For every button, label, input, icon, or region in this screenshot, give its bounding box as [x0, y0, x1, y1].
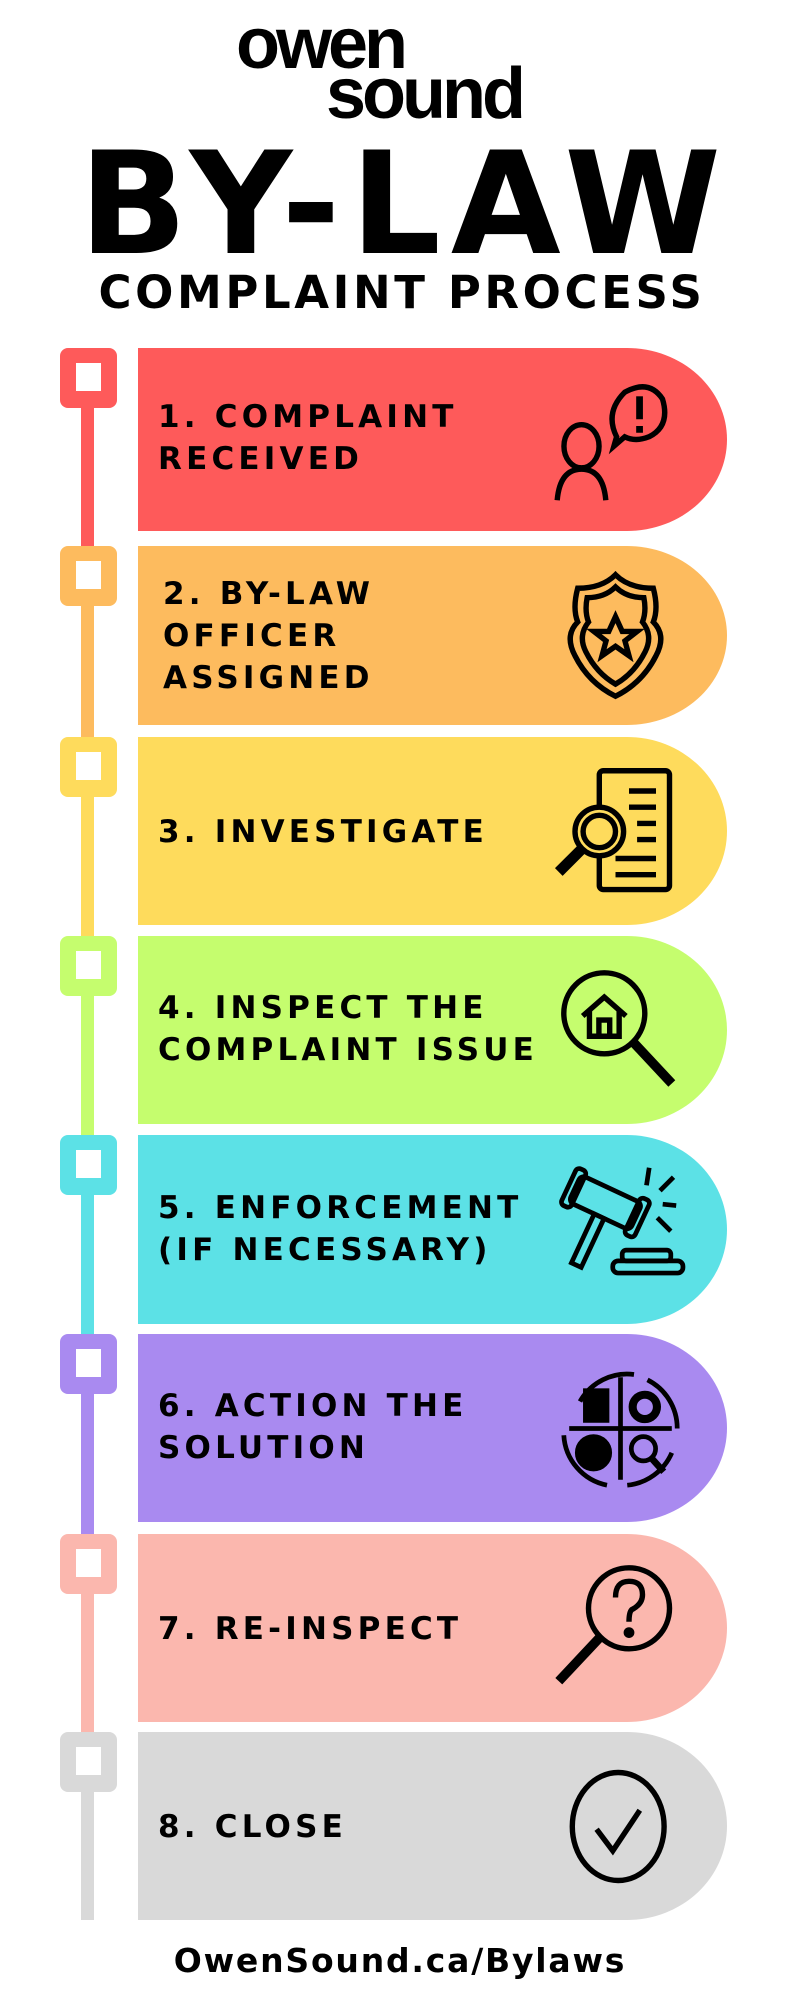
step 5 text: 5. ENFORCEMENT: [158, 1190, 523, 1226]
step 6 text: [158, 1388, 468, 1466]
step 2 text: 2. BY-LAW: [163, 576, 374, 612]
step 3 text: 3. INVESTIGATE: [158, 814, 488, 850]
logo: owen sound: [236, 4, 522, 134]
step 7 text: 7. RE-INSPECT: [158, 1611, 462, 1647]
step 1 text: [158, 399, 458, 477]
step 1 text: 1. COMPLAINT: [158, 399, 458, 435]
step 6 text: SOLUTION: [158, 1430, 369, 1466]
icon: process cycle: [561, 1372, 680, 1488]
step 5 text: (IF NECESSARY): [158, 1232, 492, 1268]
step 6 text: 6. ACTION THE: [158, 1388, 468, 1424]
step 2 text: ASSIGNED: [163, 660, 374, 696]
icon: badge: [567, 571, 664, 700]
panel: step 2: [138, 546, 727, 725]
step 4 text: [158, 990, 538, 1068]
subtitle: COMPLAINT PROCESS: [99, 266, 705, 319]
step 5 text: [158, 1190, 523, 1268]
step 2 text: [163, 576, 374, 696]
logo: owen sound: owen: [236, 4, 404, 84]
panel: step 6: [138, 1334, 727, 1522]
icon: gavel: [559, 1166, 686, 1276]
step 4 text: 4. INSPECT THE: [158, 990, 488, 1026]
panel: step 5: [138, 1135, 727, 1324]
step 1 text: RECEIVED: [158, 441, 363, 477]
icon: question magnifier: [555, 1565, 672, 1684]
timeline: [60, 348, 117, 1920]
icon: magnifier over document: [555, 768, 672, 892]
panel: step 1: [138, 348, 727, 531]
icon: person with alert: [554, 384, 668, 500]
icon: house magnifier: [561, 970, 676, 1087]
footer url: OwenSound.ca/Bylaws: [174, 1941, 626, 1980]
panel: step 8: [138, 1732, 727, 1920]
step 8 text: 8. CLOSE: [158, 1809, 347, 1845]
icon: check circle: [570, 1770, 667, 1884]
panel: step 3: [138, 737, 727, 925]
title: BY-LAW: BY-LAW: [79, 122, 731, 287]
step 4 text: COMPLAINT ISSUE: [158, 1032, 538, 1068]
panel: step 7: [138, 1534, 727, 1722]
panel: step 4: [138, 936, 727, 1124]
logo: owen sound: sound: [326, 54, 522, 134]
step 2 text: OFFICER: [163, 618, 340, 654]
